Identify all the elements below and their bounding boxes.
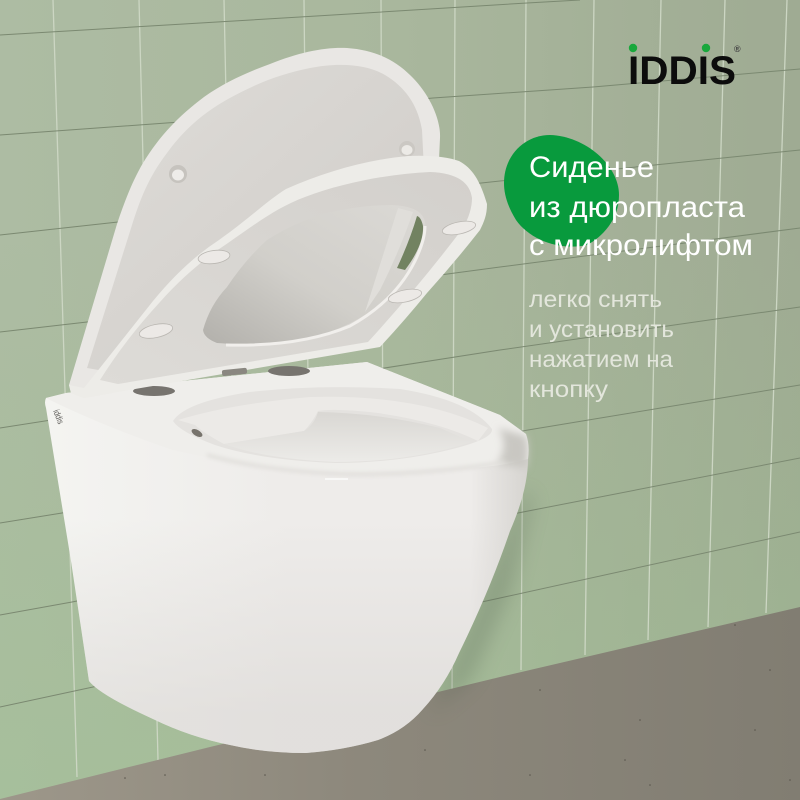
bowl rim top bbox=[46, 362, 529, 472]
hinge left bbox=[133, 386, 175, 396]
rim right shading bbox=[497, 428, 528, 468]
bowl body bbox=[45, 362, 528, 753]
lid inner panel bbox=[87, 65, 424, 372]
bumper upper right bbox=[441, 219, 477, 237]
highlight on rim bbox=[325, 478, 348, 480]
green blob accent bbox=[504, 135, 619, 247]
headline: из дюропласта bbox=[529, 191, 745, 224]
opening lip bbox=[226, 226, 425, 345]
bowl water area bbox=[224, 412, 472, 462]
logo dot left bbox=[629, 44, 637, 52]
description: легко снять bbox=[529, 286, 662, 312]
bowl inner shelf bbox=[178, 397, 488, 444]
wall shadow behind toilet bbox=[430, 490, 532, 715]
toilet bowl bbox=[45, 362, 529, 753]
bumper lower right bbox=[387, 287, 423, 305]
floor bbox=[0, 607, 800, 800]
seat opening bbox=[203, 205, 425, 344]
headline: Сиденье bbox=[529, 151, 654, 184]
hinges bbox=[133, 366, 310, 396]
seat underside bbox=[100, 172, 472, 384]
hinge centre bbox=[222, 368, 247, 376]
hinge right bbox=[268, 366, 310, 376]
registered mark: ® bbox=[734, 44, 741, 54]
lid ridge seen through opening bbox=[365, 208, 413, 312]
bowl brand mark: iddis bbox=[51, 408, 66, 426]
toilet seat bbox=[69, 156, 487, 398]
logo bbox=[628, 44, 741, 93]
bumper lower left bbox=[138, 321, 174, 341]
bowl lower shading bbox=[45, 362, 528, 753]
lid rim bbox=[69, 48, 440, 398]
headline bbox=[529, 151, 753, 262]
wall seen through opening bbox=[397, 216, 423, 270]
lid peg left bbox=[169, 165, 187, 183]
drain outlet bbox=[190, 427, 204, 439]
logo wordmark: IDDIS bbox=[628, 49, 736, 93]
seat outer bbox=[69, 156, 487, 398]
bumper upper left bbox=[197, 248, 231, 266]
toilet lid bbox=[69, 48, 440, 398]
description: кнопку bbox=[529, 376, 609, 402]
rim front edge shading bbox=[207, 455, 505, 474]
description bbox=[529, 286, 674, 402]
bowl opening bbox=[173, 387, 492, 463]
logo dot right bbox=[702, 44, 710, 52]
lid peg right bbox=[399, 141, 415, 157]
description: и установить bbox=[529, 316, 674, 342]
description: нажатием на bbox=[529, 346, 673, 372]
headline: с микролифтом bbox=[529, 229, 753, 262]
